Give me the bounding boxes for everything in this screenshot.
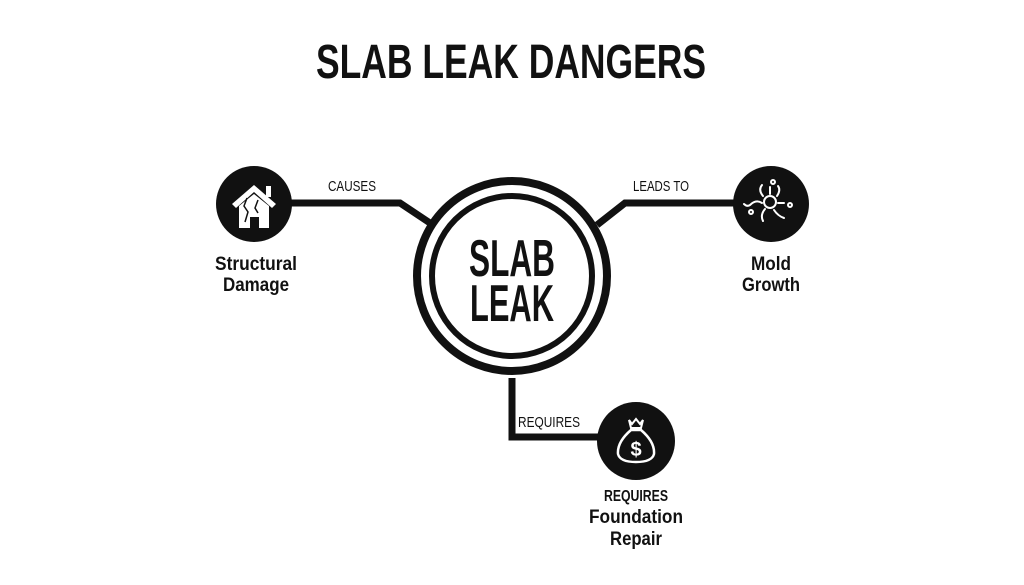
text: requires foundation repair: REQUIRES: [604, 488, 668, 505]
central hub: slab leak: SLAB: [469, 230, 555, 288]
icon: cracked house: [216, 166, 292, 242]
connector: causes: [290, 203, 430, 223]
icon: mold spore: [733, 166, 809, 242]
label: requires: REQUIRES: [518, 414, 580, 431]
text: mold growth: Growth: [742, 275, 800, 296]
text: requires foundation repair: Repair: [610, 529, 663, 550]
connector: requires: [512, 378, 600, 437]
text: structural damage: [215, 254, 297, 296]
label: leads to: LEADS TO: [633, 178, 689, 195]
icon: money bag: [597, 402, 675, 480]
text: requires foundation repair: [589, 488, 683, 550]
icon: money bag: $: [630, 439, 642, 461]
text: requires foundation repair: Foundation: [589, 507, 683, 528]
text: mold growth: [742, 254, 800, 296]
central hub: slab leak: [417, 181, 607, 371]
text: structural damage: Structural: [215, 254, 297, 275]
title: SLAB LEAK DANGERS: [316, 36, 706, 89]
connector: leads to: [597, 203, 735, 225]
central hub: slab leak: LEAK: [470, 275, 554, 333]
text: structural damage: Damage: [223, 275, 289, 296]
label: causes: CAUSES: [328, 178, 376, 195]
text: mold growth: Mold: [751, 254, 791, 275]
